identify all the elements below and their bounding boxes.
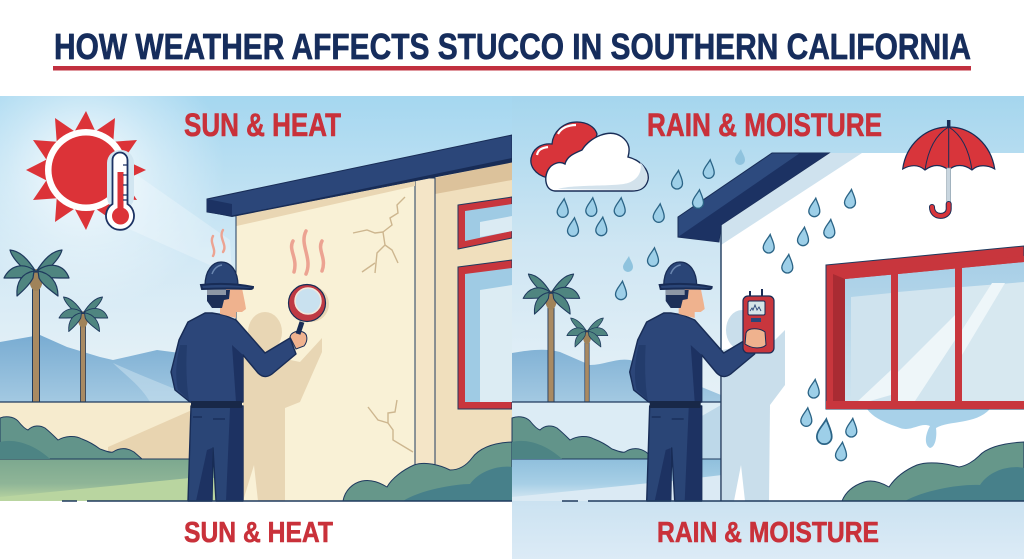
bush right	[343, 442, 512, 501]
panel: sun and heat	[0, 96, 512, 549]
heading: sun & heat bottom: SUN & HEAT	[184, 517, 333, 549]
sun icon	[26, 111, 146, 230]
water stain	[867, 409, 990, 448]
umbrella icon	[903, 120, 995, 216]
mountains	[0, 335, 200, 402]
low wall	[0, 402, 240, 459]
wall cracks	[353, 197, 413, 452]
inspector	[171, 262, 307, 501]
rain drops wall	[763, 190, 857, 461]
title underline	[53, 66, 971, 70]
rain drops sky	[557, 149, 745, 300]
heading: sun & heat top: SUN & HEAT	[184, 107, 341, 143]
palm tree large	[523, 274, 580, 468]
ground line	[62, 500, 512, 502]
bush left	[512, 417, 654, 459]
inspector shadow	[722, 310, 785, 501]
cloud icon	[531, 122, 648, 191]
palm tree small	[567, 318, 608, 458]
roof	[207, 135, 512, 217]
wall side panels	[415, 158, 512, 501]
heading: rain & moisture bottom: RAIN & MOISTURE	[657, 517, 879, 549]
stucco wall	[236, 178, 415, 501]
pavement	[512, 460, 722, 500]
left window upper	[458, 197, 512, 249]
ground line	[562, 500, 1024, 502]
magnifying glass	[288, 284, 329, 334]
moisture meter	[743, 289, 774, 353]
bush left	[0, 417, 142, 459]
sky	[512, 96, 1024, 402]
inspector shadow	[243, 312, 322, 501]
sky	[0, 96, 512, 402]
roof	[678, 153, 829, 242]
heat waves	[212, 230, 323, 274]
palm tree large	[4, 250, 69, 473]
palm tree small	[59, 297, 108, 464]
bush right	[842, 442, 1024, 501]
thermometer icon	[106, 150, 134, 230]
left window lower	[458, 260, 512, 409]
low wall	[512, 402, 722, 459]
panel: rain and moisture	[512, 96, 1024, 559]
heading: rain & moisture top: RAIN & MOISTURE	[647, 107, 882, 143]
inspector	[630, 262, 766, 501]
window	[826, 246, 1024, 409]
white wall	[721, 153, 1024, 501]
sun beam	[120, 170, 232, 275]
lawn	[0, 460, 240, 500]
bottom strip	[512, 501, 1024, 559]
mountains	[512, 350, 721, 402]
